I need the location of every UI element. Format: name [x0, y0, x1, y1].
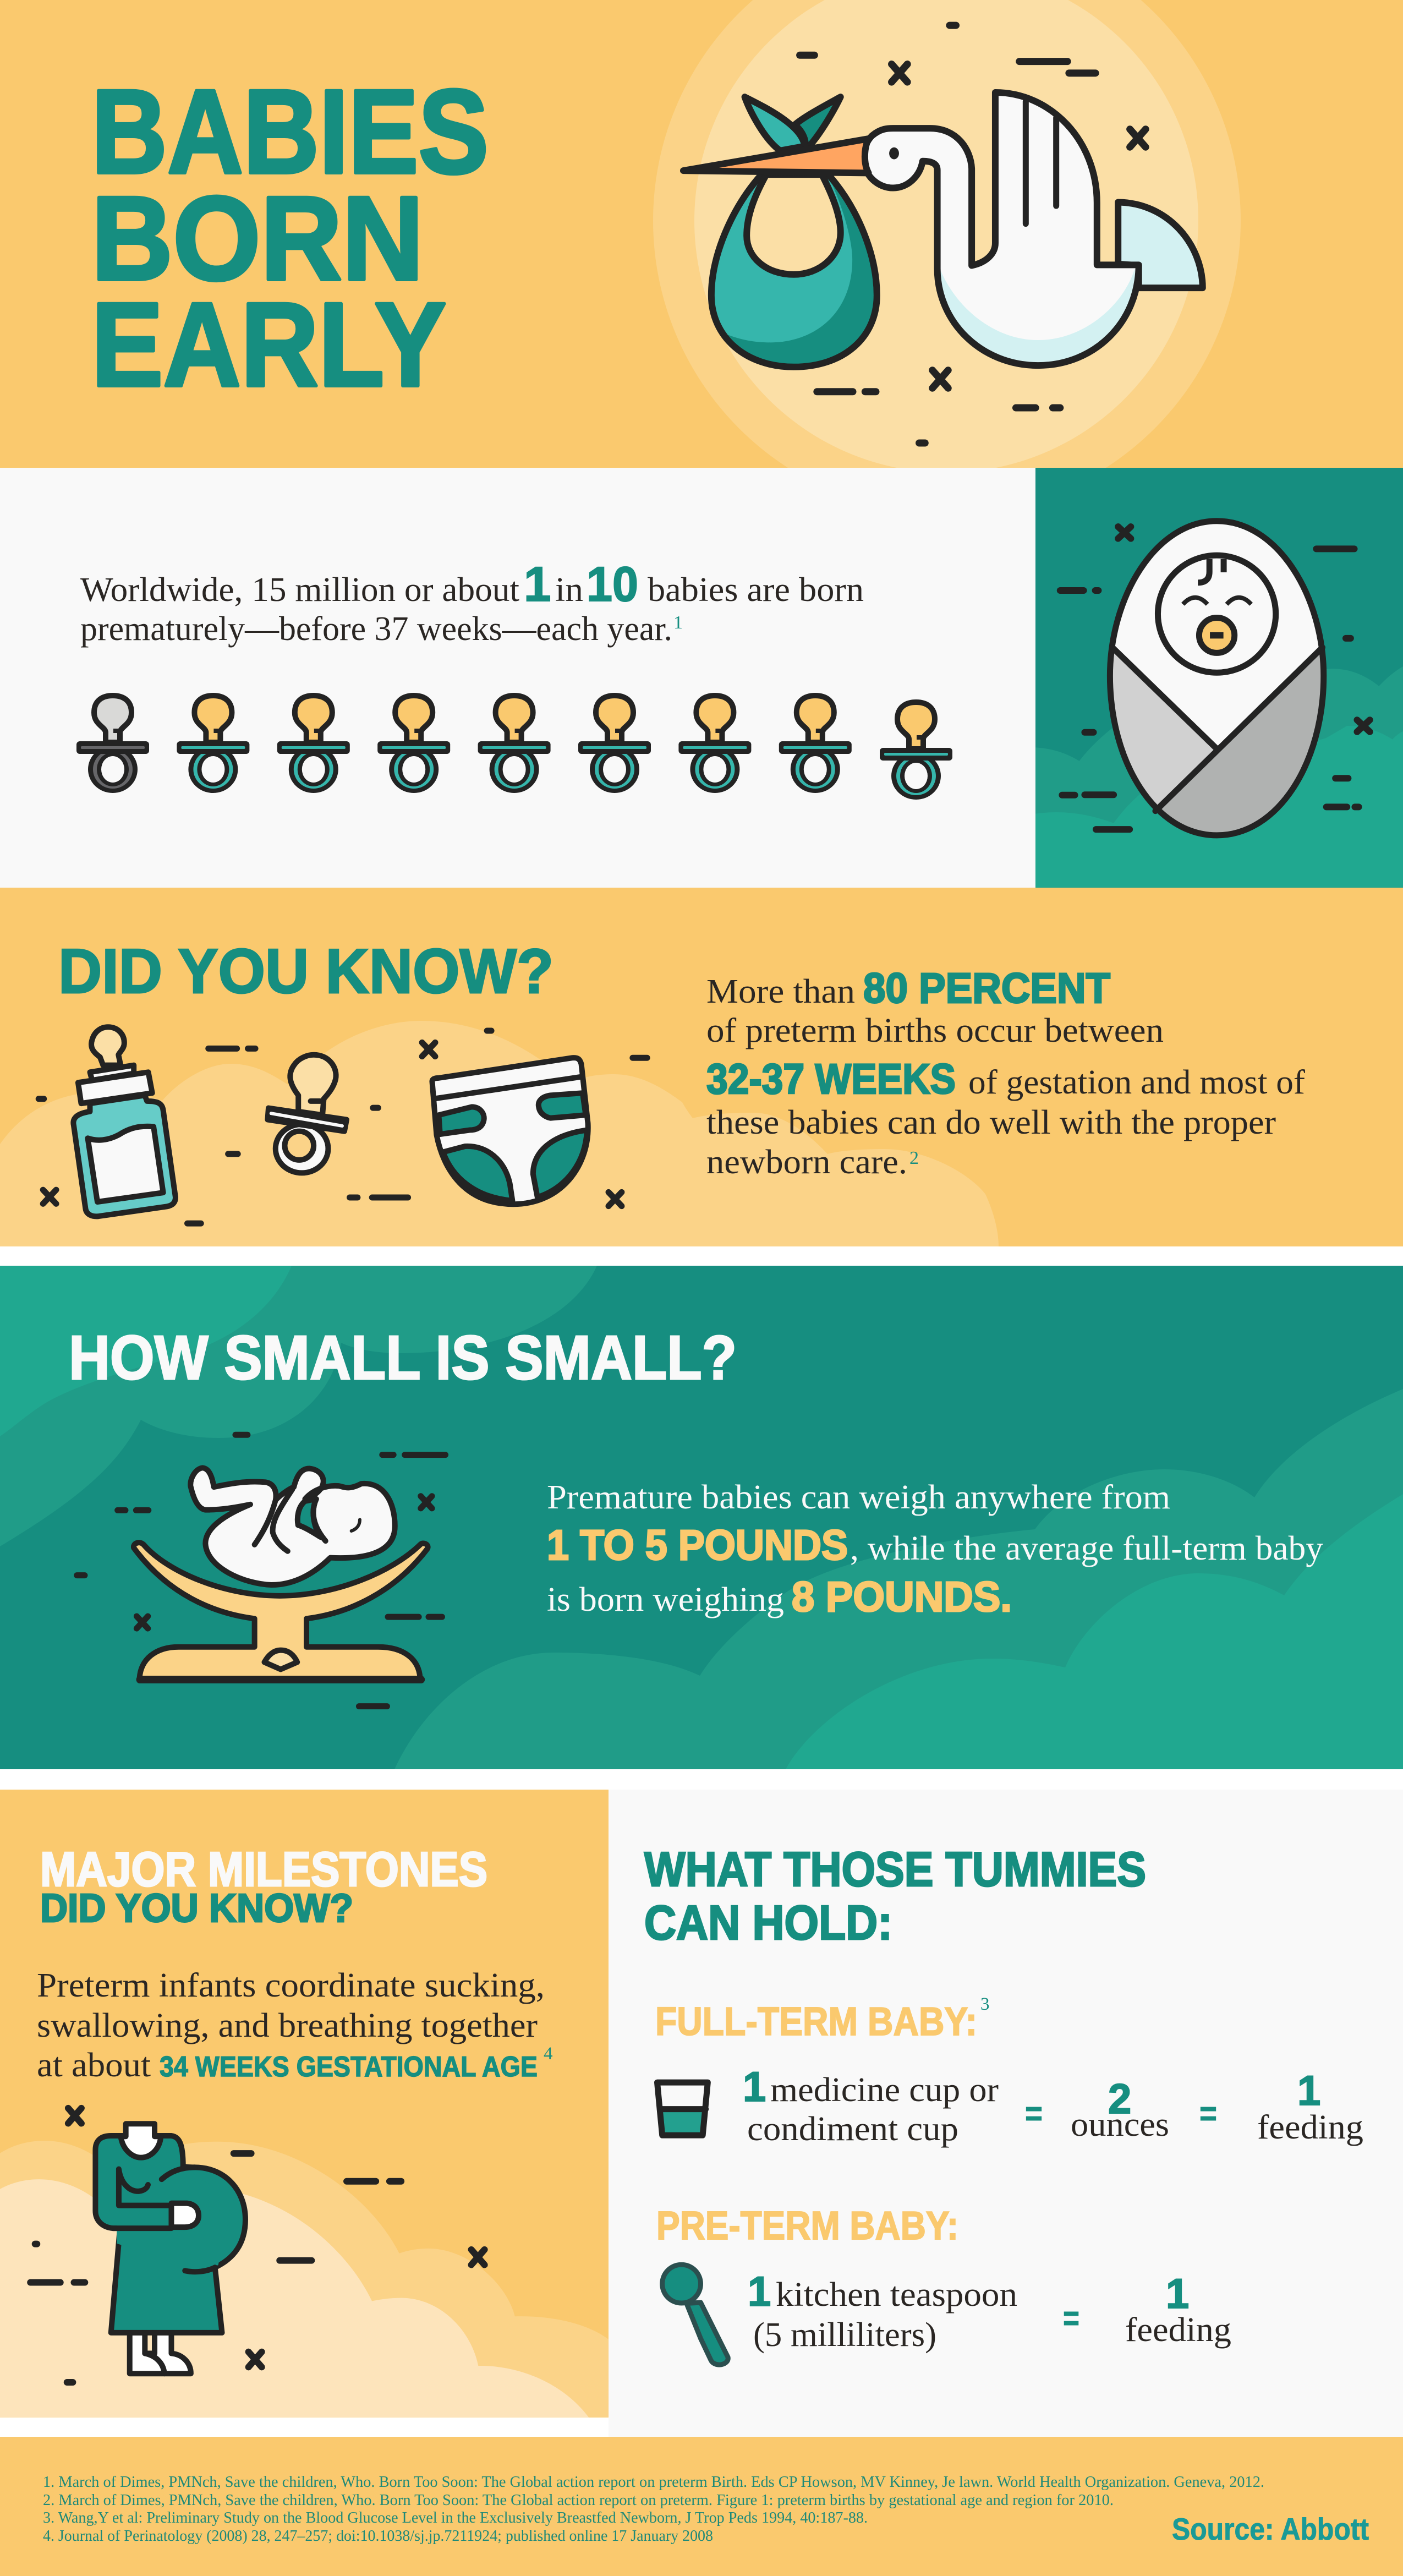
heading: CAN HOLD:: [644, 1895, 892, 1950]
marks: [77, 1435, 446, 1707]
icons: bottle, pacifier, diaper: [39, 1027, 647, 1223]
references: 3. Wang,Y et al: Preliminary Study on the Blood Glucose Level in the Exclusively Breastfed Newborn, J Trop Peds 1994, 40:187-88.: [43, 2509, 868, 2526]
text: weights: [547, 1479, 1323, 1621]
scale: [134, 1543, 428, 1681]
panel: what those tummies can hold: [609, 1790, 1403, 2437]
panel: how small is small: [0, 1266, 1403, 1769]
text: coordination: 34 WEEKS GESTATIONAL AGE: [160, 2051, 538, 2083]
text: weights: is born weighing: [547, 1581, 784, 1618]
gray pacifier: [76, 696, 149, 793]
marks: [39, 1031, 647, 1223]
icon: pacifier: [267, 1055, 347, 1173]
stork beak: [683, 139, 869, 173]
panel: major milestones: [0, 1790, 609, 2418]
text: eighty percent: 2: [909, 1148, 919, 1168]
subheading: pre-term baby: PRE-TERM BABY:: [656, 2204, 958, 2248]
text: coordination: swallowing, and breathing together: [37, 2007, 538, 2044]
panel: did you know: [0, 888, 1403, 1246]
cloud background: [0, 1021, 999, 1246]
text: coordination: Preterm infants coordinate sucking,: [37, 1967, 545, 2004]
text: weights: 8 POUNDS.: [792, 1573, 1012, 1621]
clouds: [0, 2141, 609, 2418]
text: eighty percent: of gestation and most of: [968, 1064, 1305, 1101]
statistic text: 1: [524, 556, 551, 611]
cloud backgrounds: [0, 1266, 1403, 1769]
equation: full-term: feeding: [1257, 2109, 1363, 2146]
marks: [30, 2108, 485, 2382]
equation: full-term: 2: [1108, 2076, 1131, 2123]
icon: medicine cup: [657, 2082, 708, 2135]
equation: pre-term: kitchen teaspoon: [776, 2276, 1017, 2314]
bundle bag: [711, 174, 877, 367]
baby: [190, 1468, 395, 1585]
statistic text: 1: [673, 612, 683, 633]
icon: teaspoon: [662, 2265, 728, 2365]
equation: pre-term: [748, 2268, 1231, 2354]
heading: DID YOU KNOW?: [40, 1886, 353, 1930]
pacifier row: 1 of 10: [76, 696, 952, 800]
panel: footer references: [0, 2437, 1403, 2576]
icon: swaddled baby with clouds: [1035, 521, 1403, 888]
marks: [800, 25, 1146, 443]
equation: full-term: 1: [743, 2064, 766, 2110]
equation: pre-term: (5 milliliters): [753, 2316, 936, 2354]
references: 1. March of Dimes, PMNch, Save the children, Who. Born Too Soon: The Global action report on preterm Birth. Eds CP Howson, MV Kinney, Je lawn. World Health Organization. Geneva, 2012.: [43, 2474, 1264, 2491]
references: [43, 2474, 1264, 2545]
dress: [95, 2124, 245, 2333]
statistic text: in: [555, 571, 583, 609]
statistic text: Worldwide, 15 million or about: [80, 571, 519, 609]
equation: full-term: condiment cup: [747, 2110, 958, 2148]
equation: full-term: =: [1025, 2093, 1043, 2133]
text: eighty percent: 80 PERCENT: [863, 965, 1110, 1012]
heading: [40, 1842, 487, 1930]
legs and shoes: [130, 2333, 191, 2373]
text: eighty percent: [706, 965, 1305, 1181]
title: BORN: [91, 172, 424, 305]
statistic text: babies are born: [648, 571, 864, 609]
bundle knot leaves: [745, 97, 841, 151]
text: coordination: at about: [37, 2047, 151, 2084]
text: eighty percent: these babies can do well with the proper: [706, 1104, 1276, 1141]
stork body: [864, 92, 1139, 365]
references: 2. March of Dimes, PMNch, Save the children, Who. Born Too Soon: The Global action report on preterm. Figure 1: preterm births by gestational age and region for 2010.: [43, 2492, 1114, 2509]
text: eighty percent: 32-37 WEEKS: [706, 1055, 956, 1103]
panel: swaddled baby: [1035, 468, 1403, 888]
stork tail: [1118, 203, 1203, 288]
statistic text: [80, 556, 864, 648]
panel: one in ten statistic: [0, 468, 1035, 888]
heading: MAJOR MILESTONES: [40, 1842, 487, 1896]
icon: diaper: [432, 1058, 588, 1204]
subheading: full-term baby: 3: [980, 1994, 989, 2014]
heading: DID YOU KNOW?: [58, 937, 553, 1007]
source credit: Source: Abbott: [1172, 2512, 1369, 2546]
text: coordination: [37, 1967, 552, 2084]
text: weights: , while the average full-term baby: [850, 1530, 1323, 1567]
text: coordination: 4: [544, 2044, 552, 2064]
statistic text: prematurely—before 37 weeks—each year.: [80, 610, 672, 648]
statistic text: 10: [587, 556, 638, 611]
text: weights: 1 TO 5 POUNDS: [547, 1522, 848, 1569]
panel: header: [0, 0, 1403, 515]
equation: pre-term: 1: [1166, 2271, 1189, 2317]
equation: full-term: =: [1199, 2093, 1217, 2133]
heading: HOW SMALL IS SMALL?: [69, 1323, 737, 1392]
references: 4. Journal of Perinatology (2008) 28, 247–257; doi:10.1038/sj.jp.7211924; published online 17 January 2008: [43, 2528, 713, 2545]
equation: pre-term: 1: [748, 2268, 771, 2315]
equation: pre-term: =: [1063, 2298, 1079, 2338]
heading: [644, 1842, 1146, 1950]
equation: pre-term: feeding: [1125, 2311, 1231, 2349]
icon: pregnant woman with clouds: [0, 2108, 609, 2418]
heading: WHAT THOSE TUMMIES: [644, 1842, 1146, 1896]
text: weights: Premature babies can weigh anywhere from: [547, 1479, 1170, 1516]
equation: full-term: 1: [1297, 2068, 1320, 2114]
text: eighty percent: newborn care.: [706, 1144, 907, 1181]
text: eighty percent: of preterm births occur between: [706, 1012, 1164, 1049]
icon: bottle: [73, 1027, 176, 1216]
equation: full-term: medicine cup or: [770, 2071, 999, 2109]
icon: stork carrying bundle: [683, 25, 1203, 443]
title: EARLY: [91, 278, 446, 411]
equation: full-term: ounces: [1071, 2106, 1169, 2143]
colored pacifiers: [177, 696, 952, 800]
text: eighty percent: More than: [706, 973, 855, 1010]
title: BABIES: [91, 65, 489, 198]
equation: full-term: [743, 2064, 1363, 2148]
sun circle backdrop: [653, 0, 1241, 515]
title: [97, 88, 486, 387]
subheading: full-term baby: FULL-TERM BABY:: [655, 2000, 977, 2044]
icon: baby on scale: [77, 1435, 446, 1707]
